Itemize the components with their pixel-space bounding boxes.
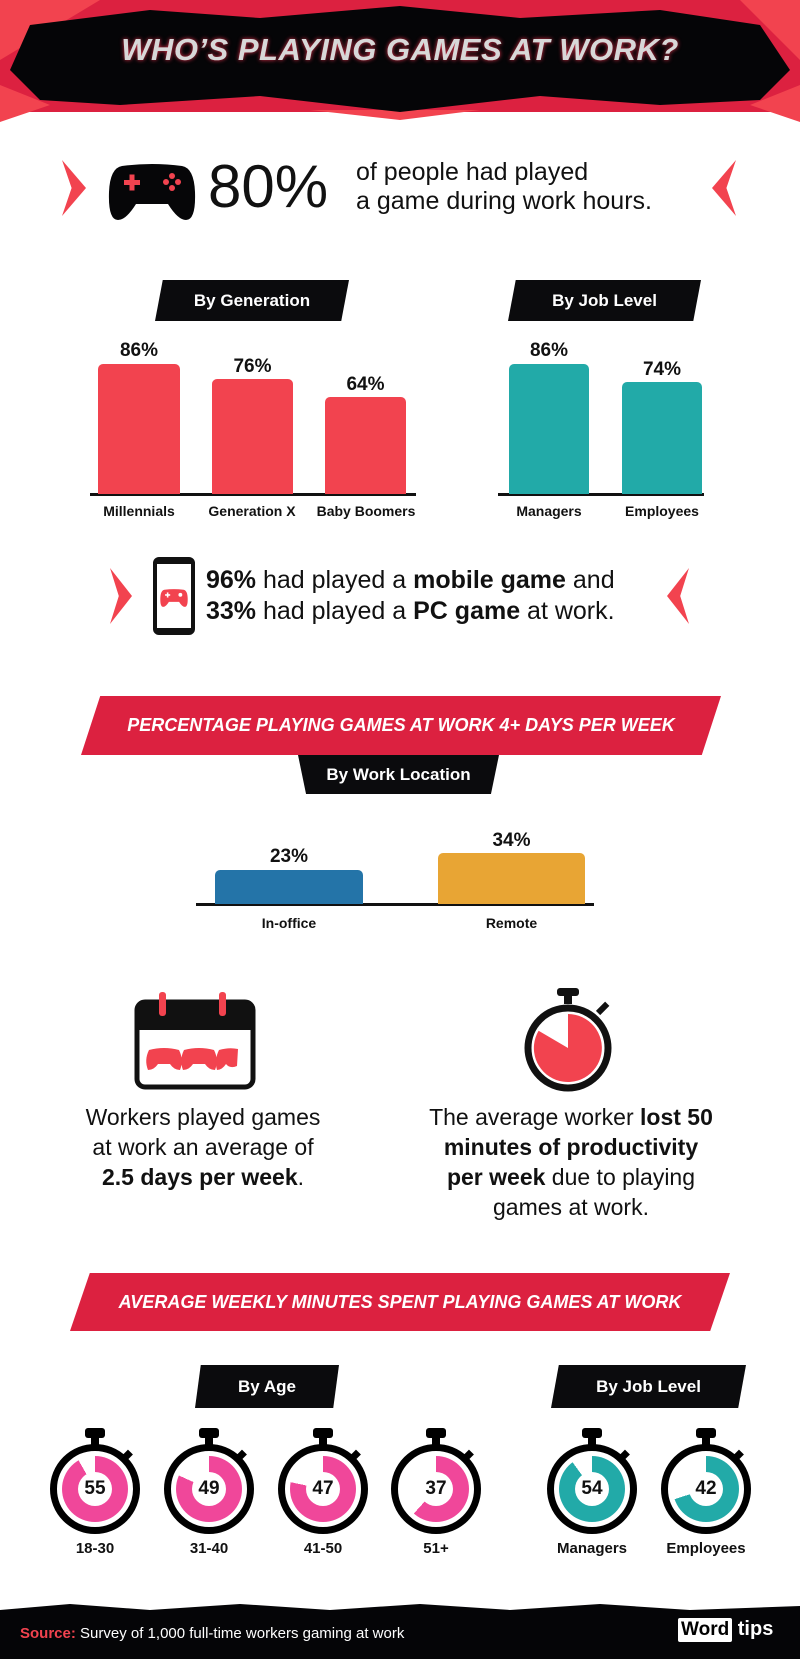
tag: by generation: By Generation <box>194 290 310 310</box>
stopwatch 51+ <box>391 1428 481 1534</box>
bar chart: by generation: Generation X <box>208 503 296 519</box>
bar chart: by job level: 86% <box>530 340 568 361</box>
bar chart: by generation: 76% <box>233 356 272 377</box>
banner: 4+ days: PERCENTAGE PLAYING GAMES AT WORK 4+ DAYS PER WEEK <box>127 715 675 735</box>
text: lost 50 minutes: per week due to playing <box>447 1164 695 1190</box>
bar chart: by job level: Employees <box>625 503 699 519</box>
text: 2.5 days <box>86 1104 320 1190</box>
stopwatches <box>50 1428 751 1557</box>
footer <box>0 1604 800 1659</box>
stopwatch 31-40: 49 <box>198 1478 220 1499</box>
icon: phone <box>153 557 195 635</box>
text: lost 50 minutes: games at work. <box>493 1194 649 1220</box>
stopwatches: 51+ <box>423 1540 449 1557</box>
stopwatches: Employees <box>666 1540 746 1557</box>
text: 2.5 days: Workers played games <box>86 1104 320 1130</box>
stopwatch employees <box>661 1428 751 1534</box>
tag: by job level 2 <box>551 1365 746 1408</box>
logo: tips <box>738 1618 773 1640</box>
tag: by job level 2: By Job Level <box>596 1376 701 1396</box>
stopwatch employees: 42 <box>695 1478 717 1499</box>
bar chart: by generation: Millennials <box>103 503 175 519</box>
text: 80% description: a game during work hours. <box>356 187 652 215</box>
title: WHO’S PLAYING GAMES AT WORK? <box>121 32 679 67</box>
bar chart: by generation: 64% <box>346 374 385 395</box>
chevron left 2 <box>110 568 132 624</box>
stopwatches: 18-30 <box>76 1540 114 1557</box>
stopwatches: 31-40 <box>190 1540 228 1557</box>
bar chart: by job level: 74% <box>643 359 681 380</box>
text: 2.5 days: at work an average of <box>92 1134 314 1160</box>
tag: by work location <box>298 755 499 794</box>
stopwatch 41-50: 47 <box>312 1478 334 1499</box>
chevron right 2 <box>667 568 689 624</box>
stopwatch 18-30 <box>50 1428 140 1534</box>
text: 80% description: of people had played <box>356 158 588 186</box>
banner: weekly minutes: AVERAGE WEEKLY MINUTES SPENT PLAYING GAMES AT WORK <box>119 1292 681 1312</box>
stopwatch 18-30: 55 <box>84 1478 106 1499</box>
text: mobile/pc: 33% had played a PC game at work. <box>206 597 615 625</box>
text: lost 50 minutes <box>429 1104 713 1220</box>
header band <box>0 0 800 122</box>
text: lost 50 minutes: minutes of productivity <box>444 1134 698 1160</box>
icon: calendar <box>134 992 256 1090</box>
text: lost 50 minutes: The average worker lost 50 <box>429 1104 713 1130</box>
tag: by job level <box>508 280 701 321</box>
logo: Word <box>681 1619 729 1640</box>
source text: Source: Survey of 1,000 full-time workers gaming at work <box>20 1625 404 1642</box>
stopwatch 31-40 <box>164 1428 254 1534</box>
bar chart: by job level <box>498 340 704 519</box>
bar chart: by work location: 34% <box>492 830 531 851</box>
text: mobile/pc: 96% had played a mobile game and <box>206 566 615 594</box>
text: mobile/pc <box>206 566 615 625</box>
icon: stopwatch big <box>524 988 612 1092</box>
banner: 4+ days <box>81 696 721 755</box>
text: 2.5 days: 2.5 days per week. <box>102 1164 304 1190</box>
tag: by generation <box>155 280 349 321</box>
stopwatch 41-50 <box>278 1428 368 1534</box>
chevron right 1 <box>712 160 736 216</box>
stopwatch 51+: 37 <box>425 1478 447 1499</box>
stat: 80%: 80% <box>208 153 328 220</box>
bar chart: by work location <box>196 830 594 931</box>
tag: by age <box>195 1365 339 1408</box>
tag: by age: By Age <box>238 1376 296 1396</box>
bar chart: by work location: In-office <box>262 915 316 931</box>
logo <box>678 1618 773 1642</box>
stopwatch managers: 54 <box>581 1478 603 1499</box>
tag: by job level: By Job Level <box>552 290 657 310</box>
stopwatch managers <box>547 1428 637 1534</box>
chevron left 1 <box>62 160 86 216</box>
bar chart: by work location: Remote <box>486 915 537 931</box>
tag: by work location: By Work Location <box>326 764 471 784</box>
bar chart: by generation <box>90 340 416 519</box>
bar chart: by job level: Managers <box>516 503 582 519</box>
stopwatches: 41-50 <box>304 1540 342 1557</box>
icon: gamepad <box>108 164 196 220</box>
bar chart: by work location: 23% <box>270 846 308 867</box>
bar chart: by generation: 86% <box>120 340 158 361</box>
bar chart: by generation: Baby Boomers <box>317 503 415 519</box>
stopwatches: Managers <box>557 1540 627 1557</box>
banner: weekly minutes <box>70 1273 730 1331</box>
text: 80% description <box>356 158 652 215</box>
